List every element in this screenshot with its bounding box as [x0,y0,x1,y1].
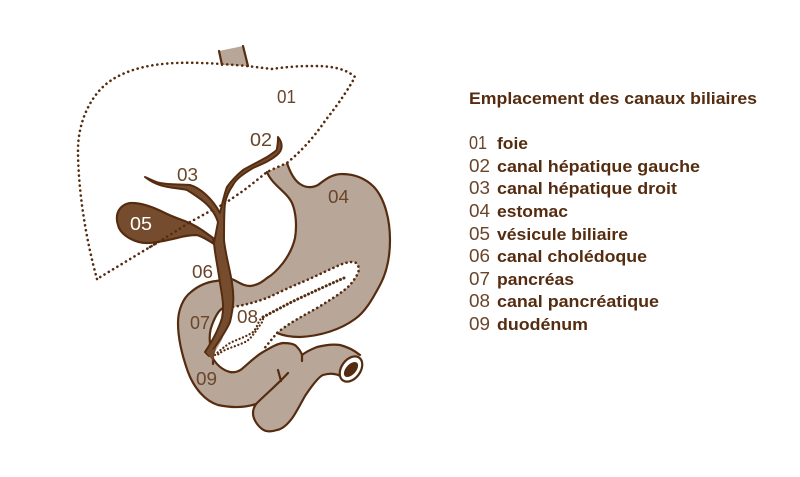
legend list: canal hépatique droit [497,179,677,198]
legend list [469,133,700,334]
legend list: estomac [497,202,568,221]
intestine fold [213,355,302,404]
diagram number labels: 05 [130,213,152,234]
diagram number labels: 03 [177,164,198,185]
legend list: duodénum [497,315,588,334]
pancreatic duct [215,278,344,357]
pancreas dotted outline [233,262,359,350]
duct outlet [206,348,216,361]
legend heading: Emplacement des canaux biliaires [469,89,757,108]
legend list: pancréas [497,270,574,289]
legend list: 09 [469,314,490,334]
diagram number labels: 09 [196,368,217,389]
diagram: biliary anatomy [78,46,390,431]
diagram number labels: 04 [328,186,349,207]
legend list: 05 [469,224,490,244]
legend list: 02 [469,156,490,176]
liver dotted line over gallbladder [150,222,190,247]
legend list: 06 [469,246,490,266]
duodenum and intestine outline [178,172,360,431]
intestine opening [335,352,367,386]
diagram number labels: 07 [190,312,210,333]
legend list: canal cholédoque [497,247,647,266]
legend list: canal pancréatique [497,292,659,311]
legend list: 07 [469,269,490,289]
bile ducts [145,137,282,356]
legend list: 03 [469,178,490,198]
inner opening beside pancreas head [210,308,231,344]
diagram number labels [130,86,349,389]
gallbladder [117,203,214,244]
diagram number labels: 01 [277,86,296,107]
diagram number labels: 06 [192,261,213,282]
legend list: foie [497,134,528,153]
legend list: canal hépatique gauche [497,157,700,176]
stomach outer outline [277,163,390,337]
legend list: 08 [469,291,490,311]
esophagus [219,46,248,66]
diagram number labels: 08 [237,306,258,327]
stomach, duodenum and small intestine fill [178,163,390,431]
liver dotted outline [78,63,355,279]
legend list: 04 [469,201,490,221]
diagram number labels: 02 [250,129,272,150]
legend list: vésicule biliaire [497,225,628,244]
legend list: 01 [469,133,487,153]
